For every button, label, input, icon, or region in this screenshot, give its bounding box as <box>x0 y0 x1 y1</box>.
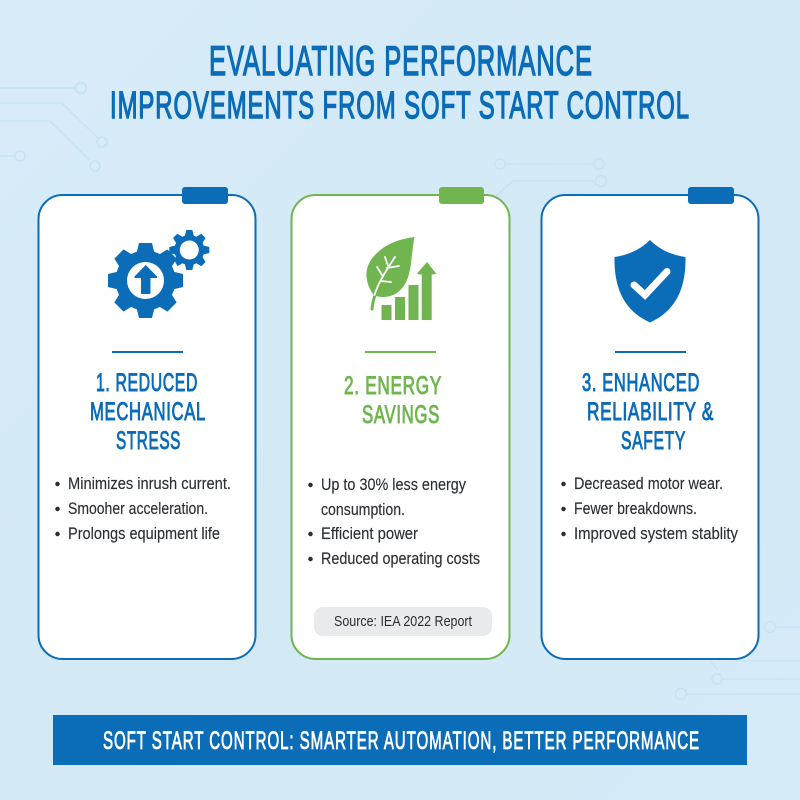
divider <box>365 351 436 353</box>
heading: STRESS <box>116 427 181 455</box>
bullet list: Decreased motor wear. <box>574 474 723 493</box>
bullet list: Prolongs equipment life <box>68 524 220 543</box>
panel: reduced mechanical stress <box>38 187 256 659</box>
bullet list: Improved system stablity <box>574 524 738 543</box>
panel: enhanced reliability and safety <box>542 187 758 659</box>
heading <box>582 369 714 455</box>
icon: shield with check <box>614 240 686 322</box>
card frame <box>38 195 256 659</box>
card frame <box>292 195 510 659</box>
divider <box>112 351 183 353</box>
card tab <box>439 187 484 204</box>
heading: MECHANICAL <box>90 398 206 426</box>
bullet list <box>561 474 738 543</box>
icon: gears <box>108 230 209 318</box>
heading: SAFETY <box>621 427 686 455</box>
title <box>110 37 690 127</box>
icon: leaf and growth chart <box>366 237 436 320</box>
heading: 3. ENHANCED <box>582 369 700 397</box>
divider <box>615 351 686 353</box>
bullet list <box>55 474 231 543</box>
card tab <box>688 187 734 204</box>
bullet list: consumption. <box>321 500 405 519</box>
heading <box>90 369 206 455</box>
bullet list <box>308 475 480 568</box>
source note: Source: IEA 2022 Report <box>334 613 473 630</box>
bottom banner <box>53 715 747 765</box>
card tab <box>182 187 228 204</box>
panel: energy savings <box>292 187 510 659</box>
heading: SAVINGS <box>362 401 440 429</box>
bullet list: Minimizes inrush current. <box>68 474 231 493</box>
heading: 1. REDUCED <box>96 369 198 397</box>
bullet list: Smooher acceleration. <box>68 499 208 518</box>
heading <box>344 372 442 429</box>
heading: RELIABILITY & <box>587 398 714 426</box>
bullet list: Fewer breakdowns. <box>574 499 697 518</box>
bullet list: Reduced operating costs <box>321 549 480 568</box>
heading: 2. ENERGY <box>344 372 442 400</box>
card frame <box>542 195 758 659</box>
bullet list: Up to 30% less energy <box>321 475 466 494</box>
bullet list: Efficient power <box>321 524 418 543</box>
source note <box>314 607 492 636</box>
